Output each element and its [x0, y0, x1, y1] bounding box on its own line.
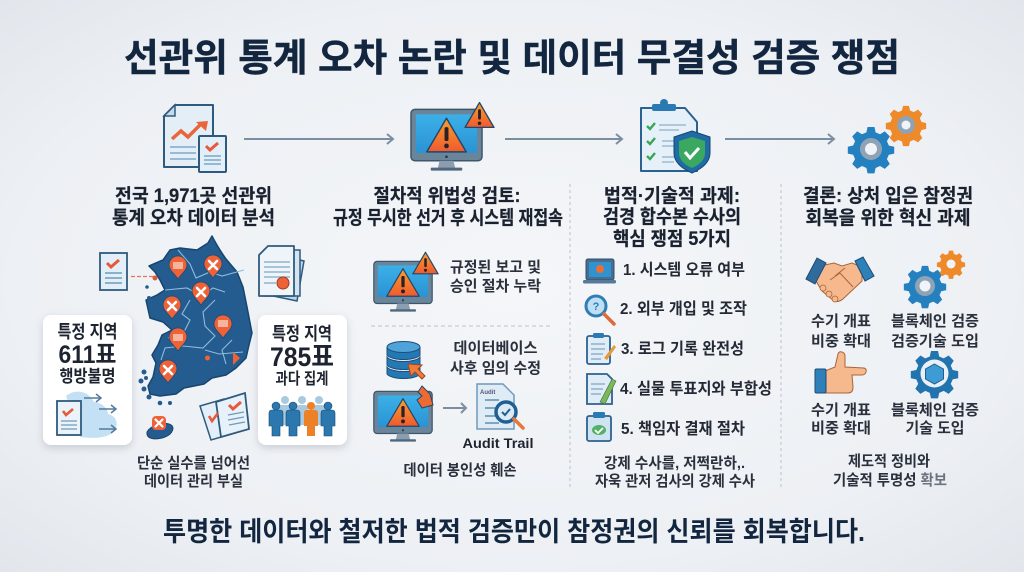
icon: crowd	[269, 396, 335, 436]
text: blockchain 1: 검증기술 도입	[891, 333, 979, 350]
list item 1: 1. 시스템 오류 여부	[623, 261, 745, 279]
text: omitted procedure: 승인 절차 누락	[450, 278, 541, 295]
list item 3	[587, 333, 744, 364]
text: blockchain 2: 블록체인 검증	[891, 402, 979, 419]
card: 785 votes excess: 특정 지역	[272, 324, 332, 344]
caption: column 3: 강제 수사를, 저쩍란하,.	[604, 455, 745, 472]
caption: column 1: 데이터 관리 부실	[144, 473, 243, 490]
heading: column 1: 전국 1,971곳 선관위	[115, 185, 272, 207]
heading: column 2: 규정 무시한 선거 후 시스템 재접속	[333, 207, 563, 229]
caption: column 2: 데이터 봉인성 훼손	[404, 462, 517, 479]
icon: audit document: Audit	[480, 390, 495, 396]
arrow: step 2 to 3	[505, 134, 622, 144]
heading: column 3: 검경 합수본 수사의	[603, 206, 741, 228]
text: hand counting 1: 비중 확대	[811, 333, 871, 350]
icon: hexagon gear	[911, 351, 958, 398]
text: database modification: 데이터베이스	[454, 340, 538, 357]
heading: column 3: 법적·기술적 과제:	[604, 185, 740, 207]
label: audit trail: Audit Trail	[462, 435, 534, 451]
card: 785 votes excess	[258, 315, 347, 445]
heading: column 2: 절차적 위법성 검토:	[374, 185, 520, 207]
arrow: to audit trail	[443, 403, 466, 413]
icon: gears	[848, 106, 926, 173]
heading: column 3: 핵심 쟁점 5가지	[613, 228, 731, 250]
list item 3: 3. 로그 기록 완전성	[621, 340, 744, 358]
list item 1	[583, 259, 745, 284]
panel: column 3 legal issues	[583, 99, 772, 490]
panel: column 2 procedural review	[333, 103, 563, 479]
icon: checklist left	[100, 253, 127, 290]
title: 선관위 통계 오차 논란 및 데이터 무결성 검증 쟁점	[124, 38, 900, 80]
map of Korea	[131, 236, 252, 439]
icon: small monitor warnings	[374, 252, 438, 312]
text: hand counting 2: 수기 개표	[811, 402, 871, 419]
icon: monitor with warnings	[411, 103, 494, 171]
card: 611 votes missing: 행방불명	[60, 367, 116, 386]
text: hand counting 1: 수기 개표	[811, 313, 871, 330]
card: 611 votes missing: 특정 지역	[58, 322, 118, 342]
panel: column 1 data analysis	[43, 105, 347, 490]
list item 2: ?	[593, 301, 600, 313]
text: blockchain 1: 블록체인 검증	[891, 313, 979, 330]
icon: ballot flying away	[57, 392, 117, 438]
heading: column 1: 통계 오차 데이터 분석	[112, 207, 275, 229]
heading: column 4: 결론: 상처 입은 참정권	[803, 185, 973, 207]
icon: report with chart	[164, 105, 226, 172]
caption: column 4: 제도적 정비와	[848, 453, 930, 470]
list item 5: 5. 책임자 결재 절차	[621, 420, 745, 438]
caption: column 1: 단순 실수를 넘어선	[137, 455, 250, 472]
caption: column 3: 자욱 관저 검사의 강제 수사	[595, 473, 755, 490]
card: 785 votes excess: 과다 집계	[276, 370, 328, 388]
icon: small gears	[904, 251, 965, 308]
list item 5	[587, 412, 745, 441]
icon: tilted ballots	[200, 393, 249, 440]
list item 2: 2. 외부 개입 및 조작	[620, 300, 747, 318]
icon: jeju island with marker	[147, 416, 173, 439]
heading: column 4: 회복을 위한 혁신 과제	[806, 207, 970, 229]
icon: monitor with broken seal	[374, 386, 433, 442]
icon: certified documents	[259, 246, 304, 301]
list item 4: 4. 실물 투표지와 부합성	[620, 380, 772, 398]
card: 611 votes missing	[43, 315, 132, 445]
list item 2	[586, 296, 747, 324]
panel: column 4 conclusion	[803, 106, 979, 489]
icon: database	[387, 342, 425, 379]
text: omitted procedure: 규정된 보고 및	[450, 259, 541, 276]
card: 611 votes missing: 611표	[58, 341, 116, 369]
bottom takeaway: 투명한 데이터와 철저한 법적 검증만이 참정권의 신뢰를 회복합니다.	[163, 517, 865, 547]
text: blockchain 2: 기술 도입	[906, 420, 964, 437]
icon: handshake	[806, 257, 874, 302]
arrow: step 3 to 4	[725, 134, 834, 144]
icon: pointing hand	[815, 352, 866, 393]
card: 785 votes excess: 785표	[270, 342, 334, 372]
text: hand counting 2: 비중 확대	[811, 420, 871, 437]
arrow: step 1 to 2	[244, 134, 393, 144]
icon: clipboard with shield	[641, 99, 710, 173]
text: database modification: 사후 임의 수정	[450, 360, 541, 377]
icon: audit document	[477, 384, 523, 429]
caption: column 4: 기술적 투명성 확보	[833, 472, 948, 489]
list item 4	[587, 374, 772, 404]
